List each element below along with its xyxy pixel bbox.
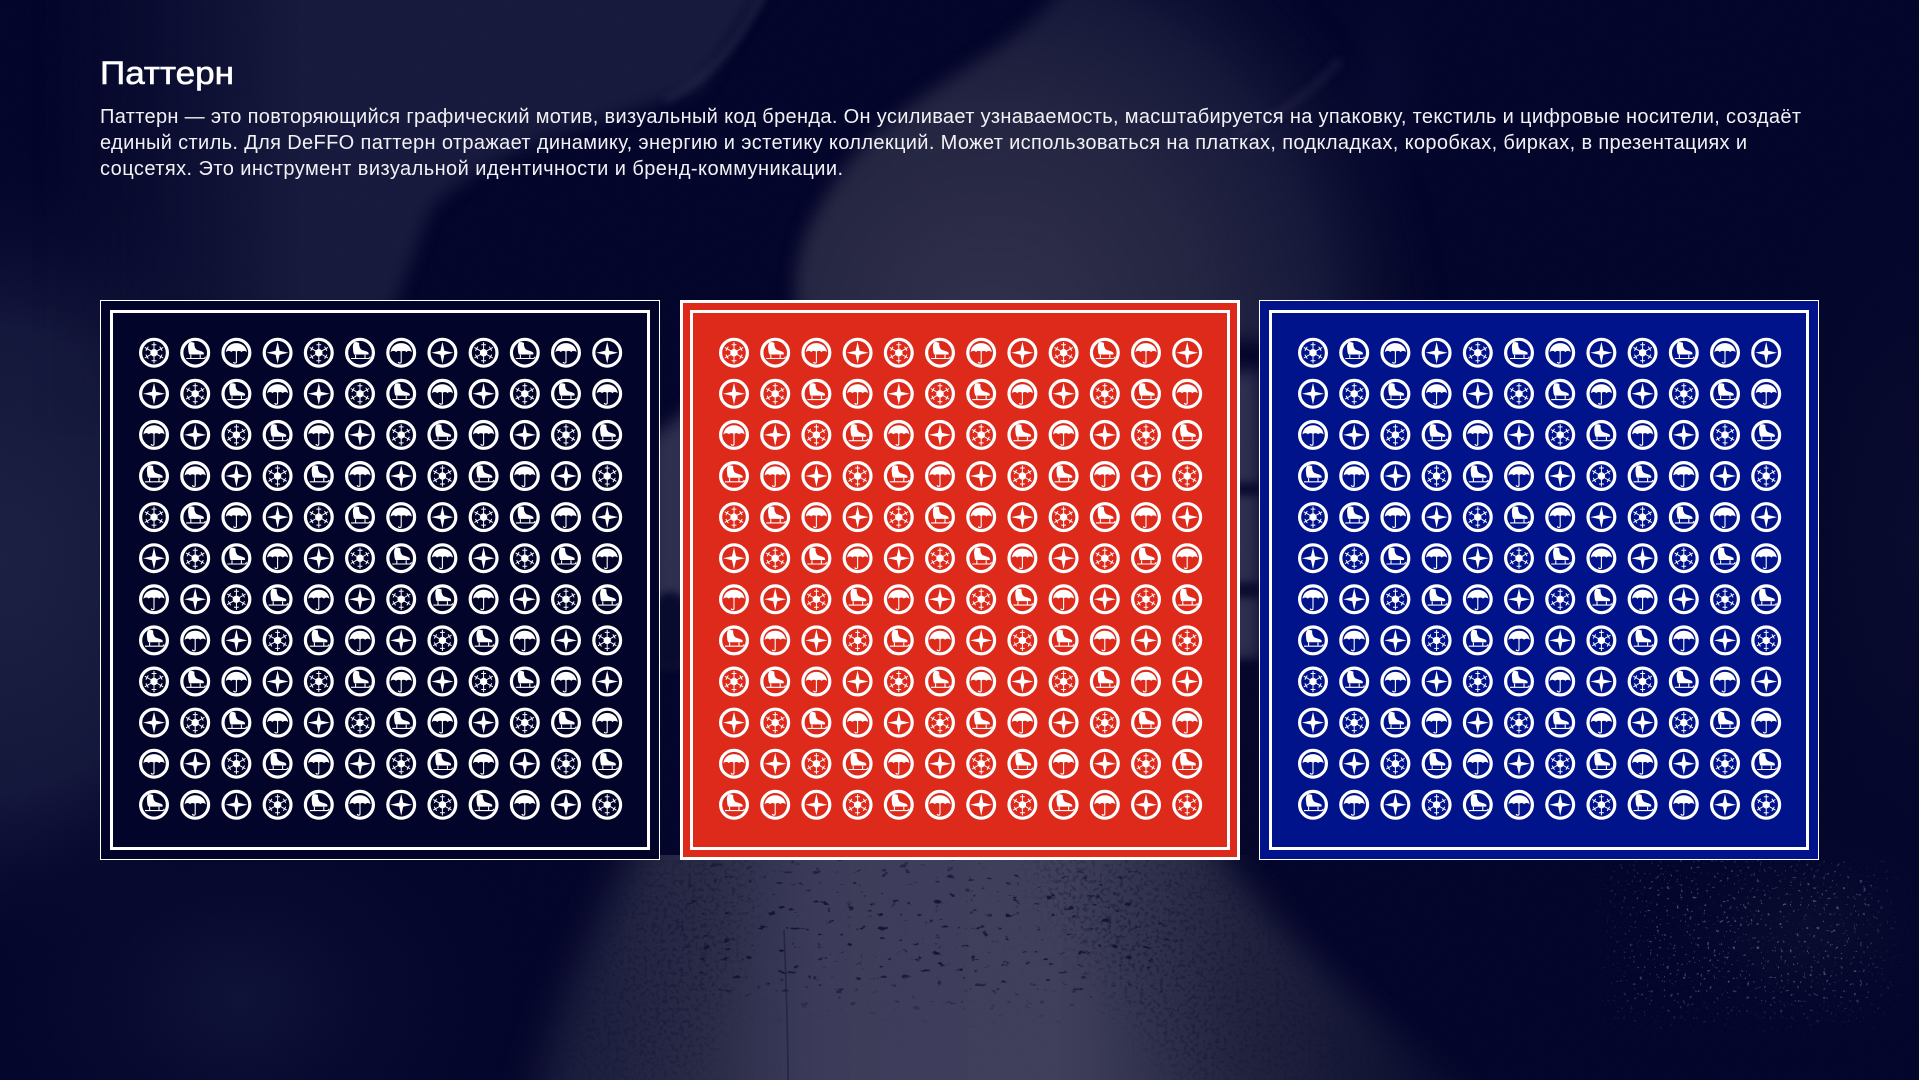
panel: red pattern <box>680 300 1240 860</box>
panel: dark navy pattern <box>100 300 660 860</box>
inner frame <box>690 310 1230 850</box>
inner frame <box>110 310 650 850</box>
text block: description: соцсетях. Это инструмент визуальной идентичности и бренд-коммуникации. <box>100 158 843 180</box>
text block: description: Паттерн — это повторяющийся графический мотив, визуальный код бренда. Он усиливает узнаваемость, масштабируется на упаковку, текстиль и цифровые носители, создаёт <box>100 106 1801 128</box>
text block: description <box>100 106 1801 180</box>
text block: description: единый стиль. Для DeFFO паттерн отражает динамику, энергию и эстетику коллекций. Может использоваться на платках, подкладках, коробках, бирках, в презентациях и <box>100 132 1747 154</box>
icon grid: snowflake, skate, umbrella, star <box>719 338 1202 820</box>
panel: blue pattern <box>1259 300 1819 860</box>
title: Паттерн <box>100 55 234 91</box>
inner frame <box>1269 310 1809 850</box>
icon grid: snowflake, skate, umbrella, star <box>139 338 622 820</box>
icon grid: snowflake, skate, umbrella, star <box>1298 338 1782 820</box>
